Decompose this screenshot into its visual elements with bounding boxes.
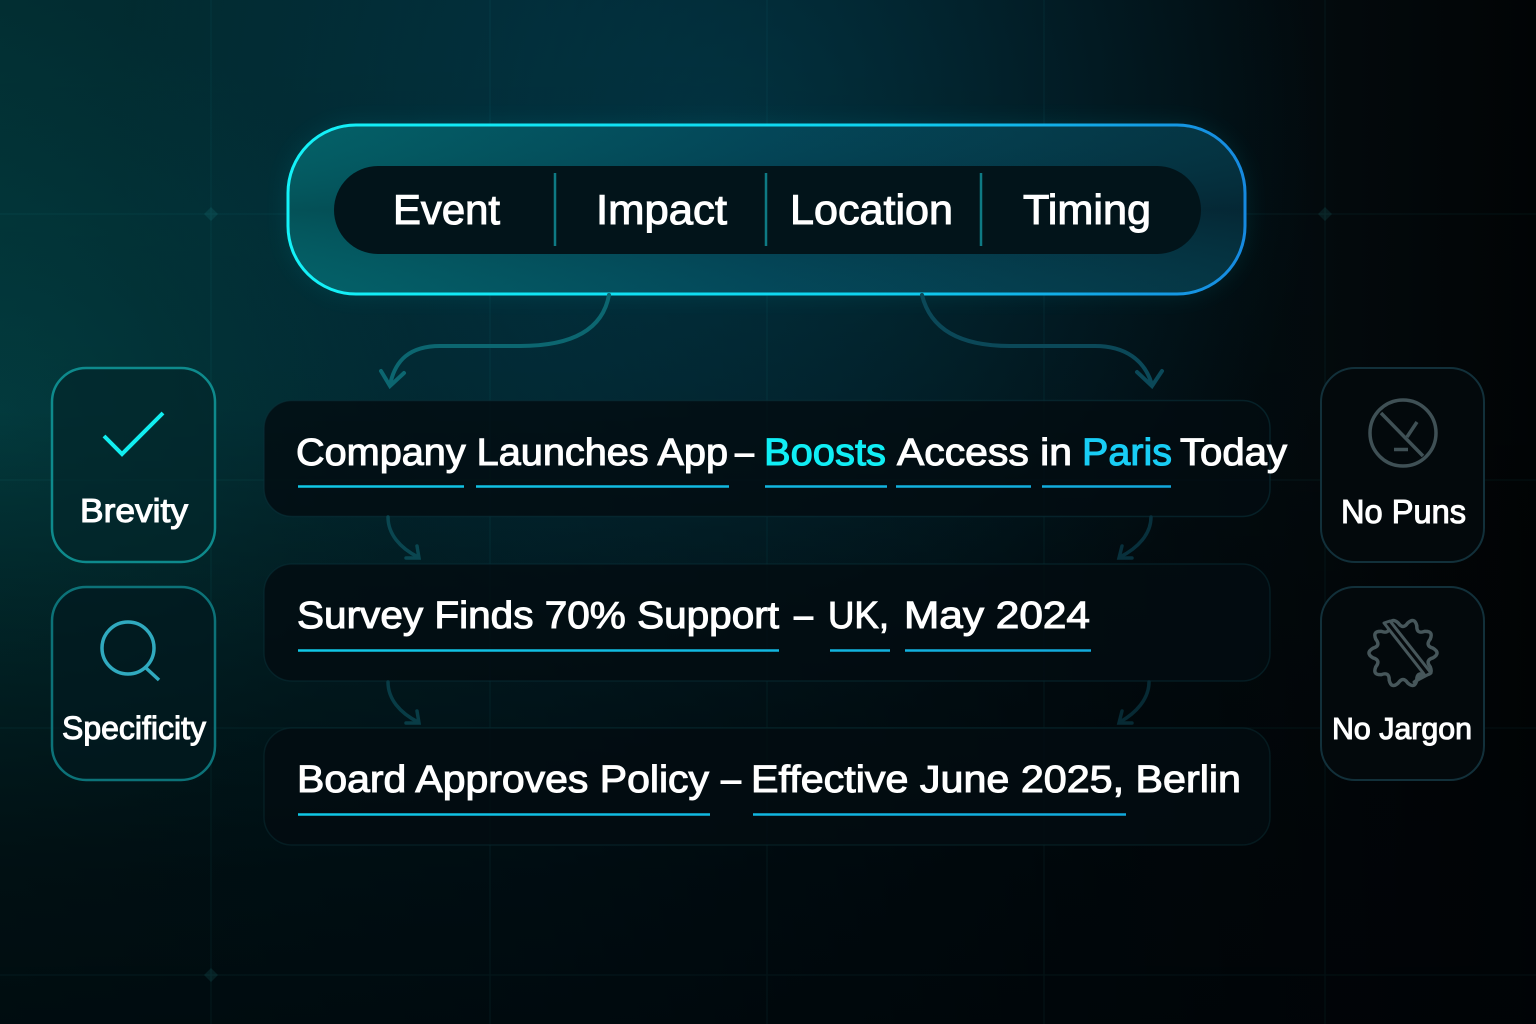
- label: Impact: Impact: [596, 186, 727, 233]
- headline 1 text: Company Launches App: [296, 432, 728, 474]
- panel: Specificity: [52, 587, 215, 780]
- headline 1 text: Today: [1180, 432, 1287, 474]
- arrow: card 2 to 3 left: [388, 682, 419, 723]
- arrow: card 1 to 2 right: [1119, 517, 1151, 558]
- headline card 3: [264, 728, 1270, 845]
- headline 3 underlines: [298, 813, 1126, 816]
- dividers: [555, 173, 981, 246]
- headline 2 text: –: [794, 595, 814, 637]
- label: No Puns: No Puns: [1341, 493, 1466, 530]
- icon: check mark: [104, 413, 163, 454]
- headline 1 underlines: [298, 485, 1171, 488]
- headline card 2: [264, 564, 1270, 681]
- headline 3 text: Board Approves Policy: [297, 759, 709, 801]
- headline 1 text: Paris: [1082, 432, 1172, 474]
- headline 2 text: [297, 595, 1090, 637]
- arrow: card 2 to 3 right: [1119, 682, 1149, 723]
- icon: magnifier: [102, 622, 159, 680]
- arrow: pill to right: [922, 295, 1162, 386]
- label: Brevity: Brevity: [80, 492, 189, 529]
- headline 3 text: [297, 759, 1241, 801]
- headline 3 text: Effective June 2025, Berlin: [751, 759, 1241, 801]
- panel: No Puns: [1321, 368, 1484, 562]
- label: Location: Location: [790, 186, 953, 233]
- inner pill: [334, 166, 1201, 254]
- headline 1 text: [296, 432, 1287, 474]
- label: No Jargon: No Jargon: [1332, 711, 1472, 746]
- panel: Brevity: [52, 368, 215, 562]
- headline 2 underlines: [298, 649, 1091, 652]
- panel: No Jargon: [1321, 587, 1484, 780]
- arrow: pill to left: [381, 295, 609, 386]
- headline 1 text: Access in: [897, 432, 1072, 474]
- headline card 1: [264, 400, 1287, 516]
- headline 2 text: Survey Finds 70% Support: [297, 595, 779, 637]
- headline 1 text: –: [735, 432, 755, 474]
- label: Timing: Timing: [1023, 186, 1151, 233]
- headline 2 text: May 2024: [904, 595, 1090, 637]
- label: Event: Event: [393, 186, 500, 233]
- arrow: card 1 to 2 left: [388, 517, 419, 558]
- icon: no puns: [1370, 400, 1436, 466]
- icon: no jargon gear: [1369, 620, 1437, 686]
- headline 2 text: UK,: [828, 595, 889, 637]
- label: Specificity: Specificity: [62, 710, 206, 746]
- headline 1 text: Boosts: [764, 432, 886, 474]
- top formula pill: [288, 125, 1245, 294]
- headline 3 text: –: [721, 759, 742, 801]
